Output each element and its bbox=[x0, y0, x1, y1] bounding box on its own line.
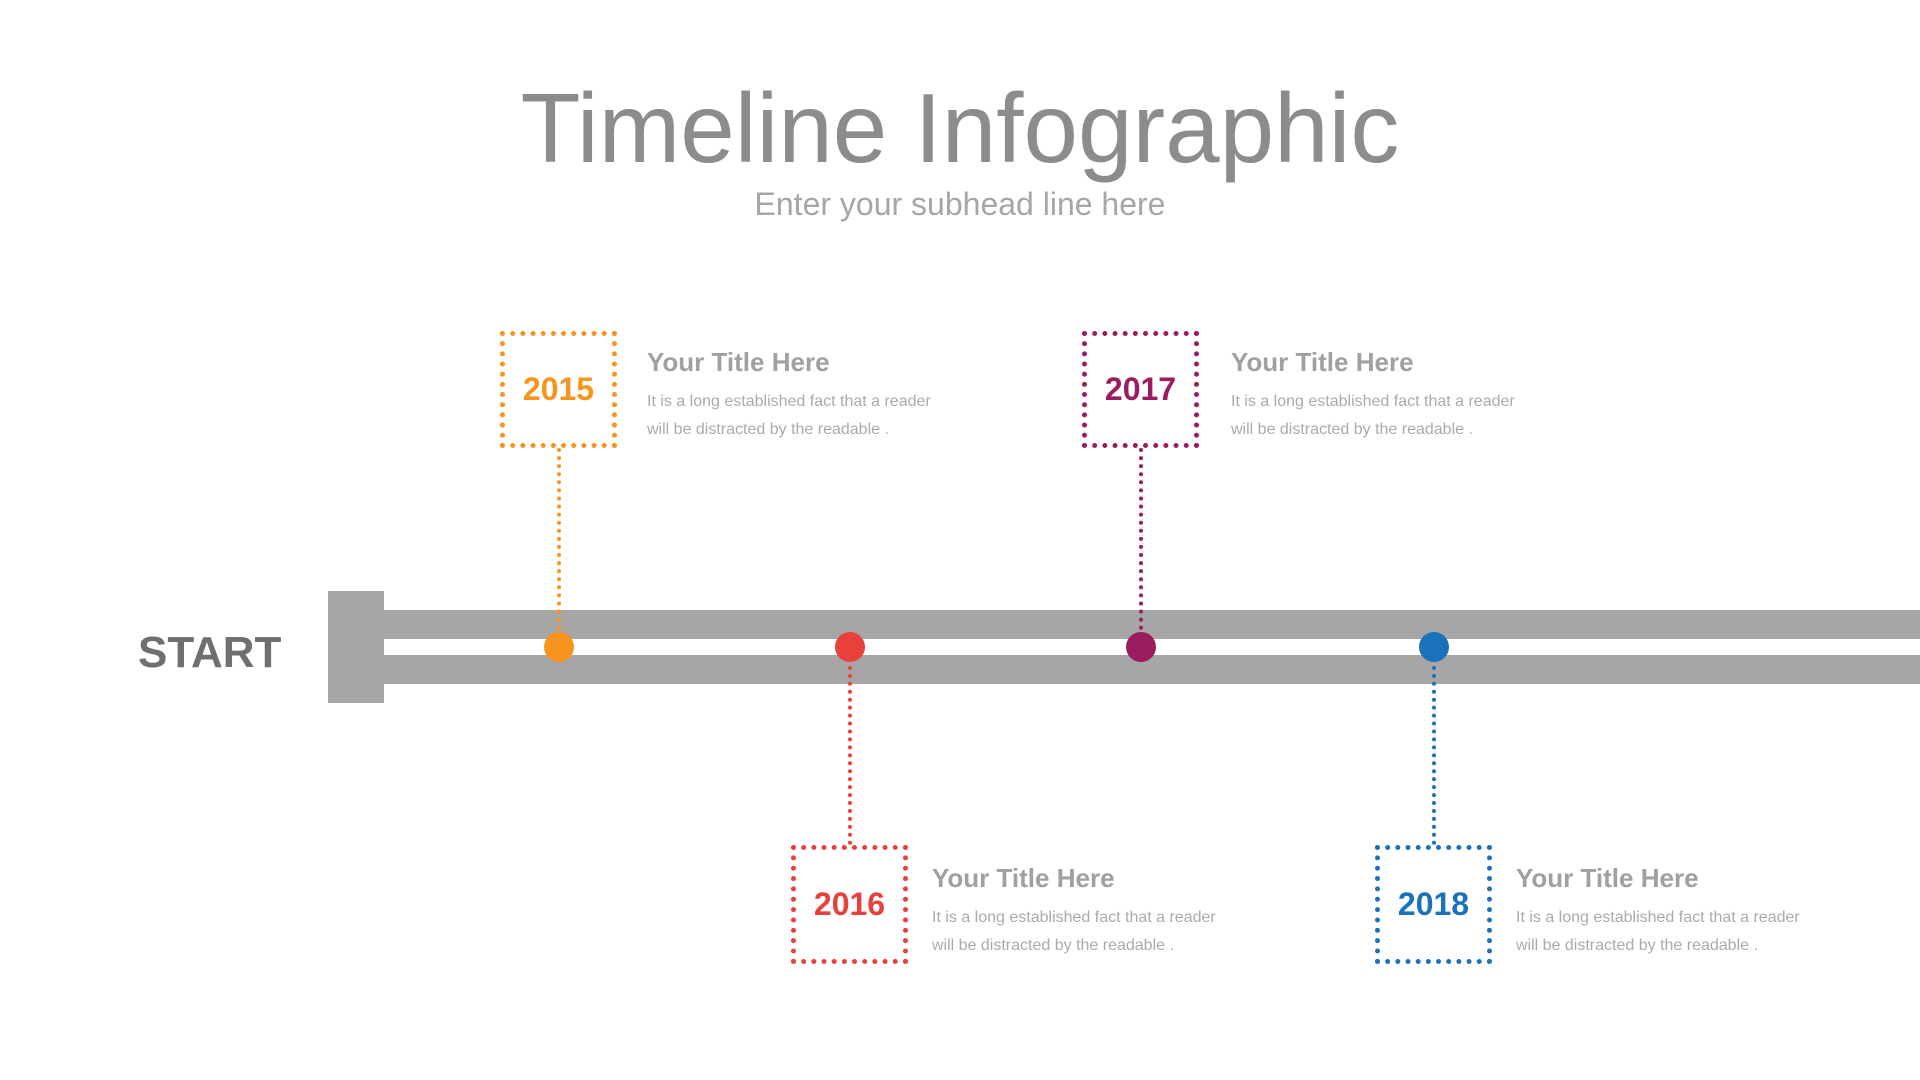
text 2018: Your Title Here bbox=[1516, 863, 1699, 893]
dot 2016 bbox=[835, 632, 865, 662]
connector 2016 bbox=[848, 650, 852, 845]
text 2017: It is a long established fact that a reader bbox=[1231, 393, 1515, 410]
text 2018: will be distracted by the readable . bbox=[1516, 937, 1758, 954]
text 2017: Your Title Here bbox=[1231, 347, 1414, 377]
connector 2017 bbox=[1139, 448, 1143, 638]
box 2018 bbox=[1375, 845, 1492, 964]
connector 2015 bbox=[557, 448, 561, 638]
box 2017 bbox=[1082, 331, 1199, 448]
text 2018: It is a long established fact that a reader bbox=[1516, 909, 1800, 926]
text 2017 bbox=[1231, 347, 1515, 438]
timeline bar bbox=[328, 591, 1920, 703]
box 2016 bbox=[791, 845, 908, 964]
start label: START bbox=[138, 628, 281, 677]
text 2015: Your Title Here bbox=[647, 347, 830, 377]
text 2017: will be distracted by the readable . bbox=[1231, 421, 1473, 438]
text 2015: It is a long established fact that a reader bbox=[647, 393, 931, 410]
text 2015 bbox=[647, 347, 931, 438]
box 2015 bbox=[500, 331, 617, 448]
box 2018: 2018 bbox=[1398, 886, 1469, 922]
box 2017: 2017 bbox=[1105, 371, 1176, 407]
box 2016: 2016 bbox=[814, 886, 885, 922]
subhead: Enter your subhead line here bbox=[755, 186, 1165, 222]
text 2016: It is a long established fact that a reader bbox=[932, 909, 1216, 926]
text 2016: will be distracted by the readable . bbox=[932, 937, 1174, 954]
dot 2018 bbox=[1419, 632, 1449, 662]
text 2015: will be distracted by the readable . bbox=[647, 421, 889, 438]
title: Timeline Infographic bbox=[521, 73, 1399, 183]
text 2016 bbox=[932, 863, 1216, 954]
text 2018 bbox=[1516, 863, 1800, 954]
dot 2015 bbox=[544, 632, 574, 662]
box 2015: 2015 bbox=[523, 371, 594, 407]
text 2016: Your Title Here bbox=[932, 863, 1115, 893]
dot 2017 bbox=[1126, 632, 1156, 662]
connector 2018 bbox=[1432, 650, 1436, 845]
